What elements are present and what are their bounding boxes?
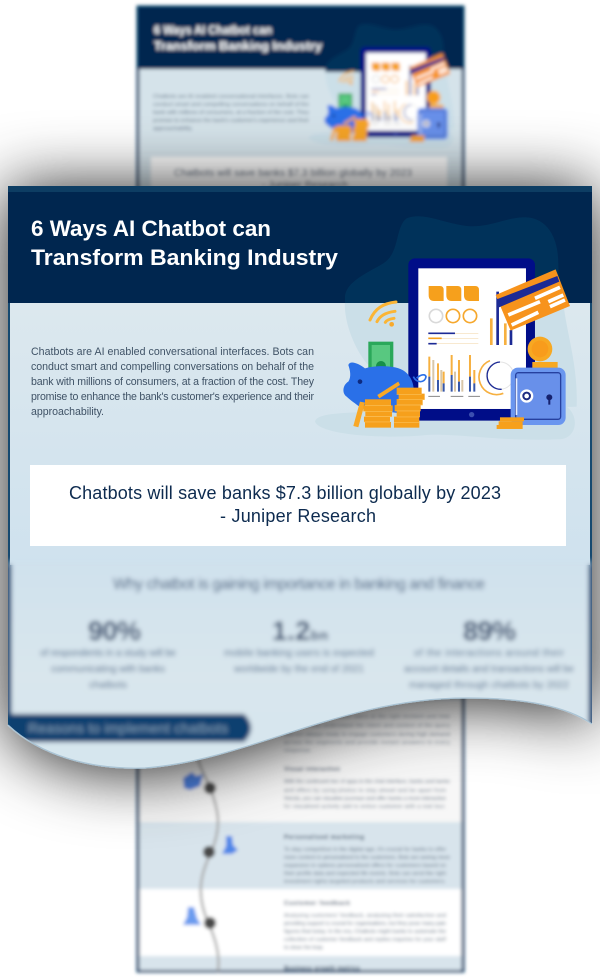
- stat: 90%: 90%: [88, 616, 141, 646]
- icon: visual interaction: [183, 772, 203, 790]
- stat caption two: mobile banking users is expected: [224, 648, 374, 659]
- back page intro text: bank with millions of consumers, at a fraction of the cost. They: [153, 110, 309, 116]
- back page intro text: [153, 94, 309, 132]
- back page intro text: approachability.: [153, 126, 193, 132]
- stat caption one: chatbots: [89, 680, 127, 691]
- back page list text: Business growth metrics: [284, 966, 361, 972]
- back page illustration: [309, 24, 454, 148]
- back page list text: and are always ready to engage customers during high demand: [284, 732, 450, 738]
- lower section background: [10, 560, 590, 790]
- back page list text: response.: [284, 748, 312, 754]
- quote box: [30, 465, 566, 546]
- back page list text: providing support is crucial for organisations, but they pose many pain: [284, 921, 446, 927]
- back page row one background: [140, 700, 461, 822]
- back page intro text: Chatbots are AI enabled conversational interfaces. Bots can: [153, 94, 309, 100]
- back page list text: [283, 714, 450, 972]
- back page intro text: conduct smart and compelling conversations on behalf of the: [153, 102, 309, 108]
- back page list text: Customer feedback: [284, 901, 351, 907]
- back page row three background: [140, 889, 461, 956]
- wave edge: [8, 698, 592, 768]
- stat caption three: of the interactions around their: [414, 648, 565, 659]
- back page quote text: [174, 168, 412, 191]
- back page list text: investment rights targeted products and services for customers.: [284, 879, 446, 885]
- back page header band: [138, 7, 463, 69]
- back page title: [154, 23, 322, 53]
- back page list text: across the segments and provide instant answers to every: [284, 740, 450, 746]
- back page title: Transform Banking Industry: [154, 39, 322, 53]
- icon: customer feedback: [183, 907, 201, 925]
- back page timeline curve: [197, 755, 219, 971]
- back page list text: collection of customer feedback and replies inquiries for your staff: [284, 937, 446, 943]
- intro paragraph: conduct smart and compelling conversations on behalf of the: [31, 361, 314, 373]
- stat caption three: [404, 648, 575, 691]
- card header band: [8, 186, 592, 303]
- back page list text: for visualised activity add to entice customer with a real tour.: [284, 804, 446, 810]
- title: 6 Ways AI Chatbot can: [31, 216, 271, 241]
- back page row two background: [140, 822, 461, 889]
- stat: 1.2bn: 1.2bn: [272, 616, 328, 646]
- stat caption one: of respondents in a study will be: [40, 648, 177, 659]
- back page list text: To stay competitive in the digital age, it's crucial for banks to offer: [284, 847, 446, 853]
- intro paragraph: approachability.: [31, 406, 104, 418]
- back page body: [138, 7, 463, 971]
- intro paragraph: [31, 346, 315, 418]
- panel: background infographic page: [138, 7, 463, 972]
- stat: 89%: 89%: [463, 616, 516, 646]
- section heading: Why chatbot is gaining importance in banking and finance: [113, 576, 485, 593]
- stat caption three: account details and transactions will be: [404, 664, 575, 675]
- intro paragraph: promise to enhance the bank's customer's experience and their: [31, 391, 314, 403]
- card light body upper: [10, 303, 590, 565]
- back page intro text: promise to enhance the bank's customer's experience and their: [153, 118, 309, 124]
- back page row four background: [140, 956, 461, 970]
- intro paragraph: bank with millions of consumers, at a fraction of the cost. They: [31, 376, 315, 388]
- card header top edge: [8, 186, 592, 192]
- back page quote text: Chatbots will save banks $7.3 billion globally by 2023: [174, 168, 412, 179]
- title: [31, 216, 338, 270]
- back page timeline dots: [203, 782, 216, 929]
- lower section side edges: [8, 562, 592, 726]
- card body background: [8, 303, 592, 726]
- back page quote text: - Juniper Research: [262, 180, 348, 191]
- illustration: banking tablet, piggy bank, coins and safe: [315, 216, 577, 440]
- back page list text: Personalised marketing: [284, 835, 364, 841]
- back page title: 6 Ways AI Chatbot can: [154, 23, 272, 37]
- back page list text: expansion in options personalised offers for customers based on: [284, 863, 446, 869]
- back page list text: more content in personalised to the customers. Bots are seeing more: [284, 855, 450, 861]
- back page list text: With the continued rise of apps in the chat interface, banks and banks: [284, 779, 450, 785]
- back page list text: conversations and reach users at the right moment and time: [284, 714, 450, 720]
- back page list text: figures that today. In the era, Chatbots might banks to automate the: [284, 929, 446, 935]
- back page list text: friends, you can visualise journeys and offer banks a more interactive: [284, 796, 446, 802]
- intro paragraph: Chatbots are AI enabled conversational interfaces. Bots can: [31, 346, 314, 358]
- back page list text: Analysing customers' feedback, analysing their satisfaction and: [284, 913, 446, 919]
- title: Transform Banking Industry: [31, 245, 338, 270]
- back page list text: to close the loop.: [284, 945, 324, 951]
- stat caption one: [40, 648, 177, 691]
- ribbon heading: [9, 714, 251, 742]
- stat caption two: [224, 648, 374, 675]
- quote text: Chatbots will save banks $7.3 billion globally by 2023: [69, 483, 501, 503]
- icon: personalised marketing: [222, 836, 238, 854]
- blurred lower section: [9, 560, 591, 790]
- back page list text: Visual interaction: [284, 767, 340, 773]
- stat caption one: communicating with banks: [51, 664, 165, 675]
- back page list text: and offers by using photos to stay ahead and be apart from: [284, 788, 446, 794]
- quote text: - Juniper Research: [220, 506, 376, 526]
- stat caption three: managed through chatbots by 2022: [409, 680, 569, 691]
- back page quote box: [151, 157, 447, 202]
- back page list text: with bots that understand the intent and context of the query: [283, 723, 450, 729]
- back page list text: their profile data and expected life events. Bots can send the right: [284, 871, 446, 877]
- ribbon text: Reasons to implement chatbots: [28, 720, 228, 736]
- quote text: [69, 483, 501, 526]
- stat caption two: worldwide by the end of 2021: [233, 664, 364, 675]
- panel: main infographic card: [8, 186, 592, 790]
